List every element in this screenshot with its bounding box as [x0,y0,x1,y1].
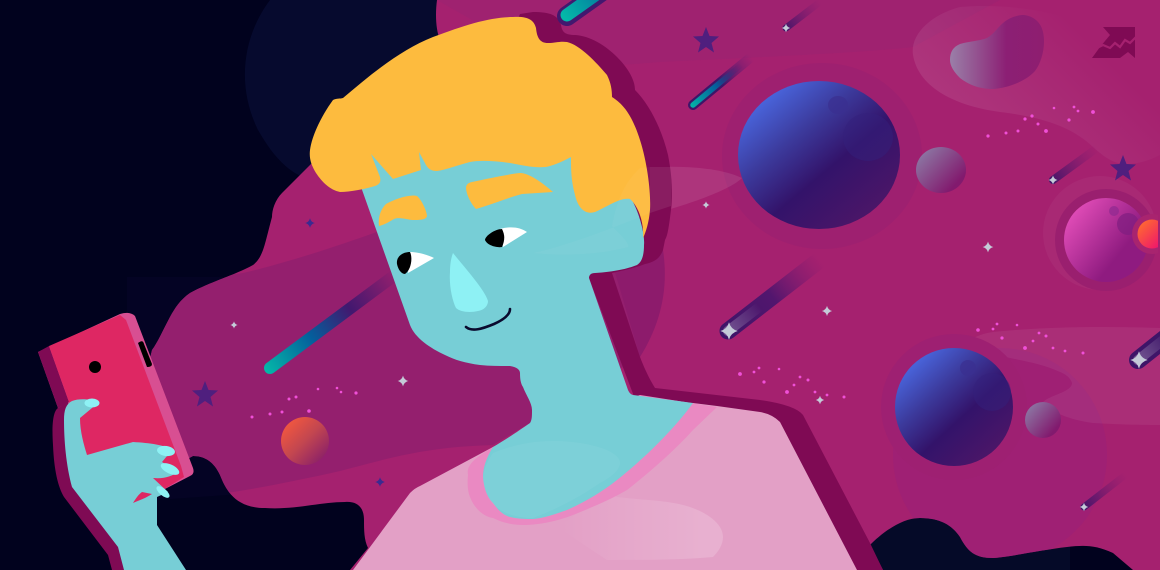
nebula swath over face [533,167,650,255]
comet: small top [782,2,820,32]
blob: grey planet top right [950,15,1044,89]
comet: large teal [270,275,395,368]
nose [450,253,488,312]
shadow circle behind neck [612,250,665,357]
sparkles [230,201,993,404]
comet: small bottom [1080,476,1124,511]
shirt [353,403,857,570]
planet: pink with moon [1055,189,1158,291]
comet: purple right edge [1130,333,1160,369]
comet: small right [1048,148,1097,184]
thumb nail [84,398,100,408]
dark cloud behind head [245,0,440,178]
dark ground lower right [860,510,1070,570]
logo icon [1092,27,1136,58]
planet halo lower [881,334,1027,480]
phone button [138,341,152,367]
eye: right [485,227,527,247]
shirt fold highlight [557,483,723,560]
planet: small grey lower [1025,402,1061,438]
star dust [250,106,1095,418]
faint haze left of nebula [127,277,270,500]
planet: big blue [738,81,900,229]
character shadow [500,12,883,570]
phone camera [89,361,101,373]
planet glow lower right [914,518,1051,558]
nebula swath lower right [967,327,1160,425]
hair [310,17,650,238]
comet: teal upper [693,58,750,105]
planet: small grey [916,147,966,193]
collar shade [483,441,620,518]
nebula top tint [437,0,1000,70]
finger nails [156,445,176,457]
planet: orange [281,417,329,465]
comet: top teal [567,0,612,16]
stars [192,27,1136,487]
planet halo top [722,63,922,249]
skin: neck and face [355,100,693,519]
nebula darker band left [150,232,638,492]
comet: purple centre [720,262,817,340]
eye: left [397,252,434,274]
palm crease [133,492,152,503]
planet: lower blue [895,348,1013,466]
hand shadow [53,402,130,570]
hand [64,398,186,570]
eyebrow: left [379,196,427,226]
nebula swath right of head [650,167,742,215]
eyebrow: right [466,173,553,209]
phone [38,313,194,490]
collar [468,395,717,525]
nebula swath top right [913,6,1160,164]
mouth [466,309,510,330]
swath over shadow [650,167,672,213]
